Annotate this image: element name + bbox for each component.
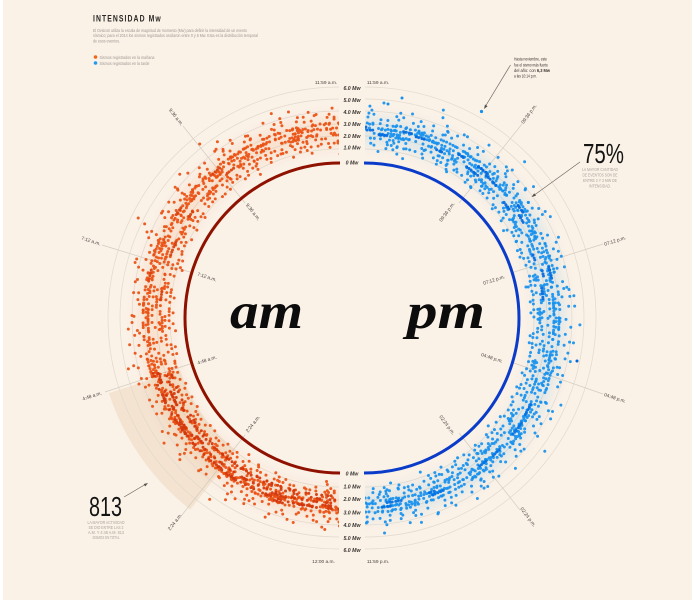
note: strongest earthquake: a las 10:14 p.m.: [514, 74, 537, 78]
magnitude labels bottom: 3.0 Mw: [343, 510, 361, 516]
magnitude labels top: 1.0 Mw: [343, 146, 361, 152]
magnitude labels top: 3.0 Mw: [343, 122, 361, 128]
magnitude labels top: 2.0 Mw: [342, 134, 361, 140]
time labels: 12:00 a.m.: [312, 559, 335, 565]
magnitude labels bottom: 0 Mw: [346, 472, 359, 478]
time labels: 2:24 a.m.: [245, 415, 262, 434]
intro text: El Ovsicori utiliza la escala de magnitud de momento (Mw) para definir la intensidad de un evento: [93, 28, 247, 34]
magnitude labels top: 4.0 Mw: [342, 110, 361, 116]
callout: 813: [88, 491, 125, 540]
big label: am: am: [230, 284, 303, 340]
magnitude labels top: [342, 86, 361, 166]
hour arc: pm: [364, 163, 519, 473]
time labels: 9:36 a.m.: [167, 108, 184, 127]
callout: 813: SISMOS EN TOTAL: [92, 535, 120, 540]
legend: [94, 55, 155, 67]
arrow: 75%: [532, 162, 580, 197]
time labels: 04:48 p.m.: [603, 392, 627, 405]
callout: 75%: INTENSIDAD.: [589, 184, 611, 188]
time labels: 4:48 a.m.: [197, 355, 218, 366]
magnitude labels bottom: [342, 472, 361, 554]
arrow: 813: [124, 483, 148, 497]
callout: 813: 813: [89, 491, 122, 522]
time labels: 11:59 a.m.: [367, 80, 389, 86]
magnitude labels bottom: 2.0 Mw: [342, 497, 361, 503]
intro text: [93, 28, 258, 44]
time spokes: [102, 124, 603, 515]
magnitude labels top: 6.0 Mw: [343, 86, 361, 92]
note: strongest earthquake: [514, 56, 550, 78]
shaded sector: 2 a.m. to 4:48 a.m.: [109, 370, 236, 510]
time labels: 7:12 a.m.: [80, 236, 101, 247]
time labels: 11:59 a.m.: [315, 80, 337, 86]
time labels: 02:24 p.m.: [519, 506, 537, 528]
magnitude labels bottom: 4.0 Mw: [342, 523, 361, 529]
magnitude labels bottom: 5.0 Mw: [343, 536, 361, 542]
time labels: 07:12 p.m.: [603, 235, 627, 248]
magnitude labels bottom: 6.0 Mw: [343, 548, 361, 554]
time labels: 04:48 p.m.: [480, 352, 504, 365]
time labels: 9:36 a.m.: [244, 203, 261, 222]
callout: 75%: LA MAYOR CANTIDAD: [582, 167, 618, 172]
callout: 75%: 75%: [583, 138, 624, 169]
time labels: 11:59 p.m.: [367, 559, 389, 565]
time labels: 7:12 a.m.: [196, 272, 217, 283]
callout: 75%: ENTRE 2 Y 3 MW DE: [583, 178, 617, 183]
time labels: 02:24 p.m.: [438, 414, 456, 436]
magnitude labels top: 0 Mw: [346, 160, 359, 166]
callout: 75%: [582, 138, 624, 188]
time labels: 07:12 p.m.: [482, 274, 506, 287]
callout: 813: A.M. Y 4:48 A.M. 813: [88, 530, 125, 535]
note: strongest earthquake: fue el sismo más fuerte: [514, 62, 548, 68]
magnitude labels top: 5.0 Mw: [343, 98, 361, 104]
arrow: strongest earthquake: [484, 65, 510, 109]
big label: pm: pm: [402, 284, 485, 340]
hour arc: am: [185, 163, 340, 473]
legend: Sismos registrados en la tarde: [100, 61, 150, 67]
time labels: 4:48 a.m.: [82, 391, 103, 402]
note: strongest earthquake: del año: con 6,3 Mw: [514, 68, 550, 73]
magnitude labels bottom: 1.0 Mw: [343, 484, 361, 490]
callout: 75%: DE EVENTOS SON DE: [582, 172, 618, 178]
title: INTENSIDAD Mw: [93, 13, 161, 24]
time labels: 09:36 p.m.: [520, 103, 538, 125]
intro text: de esos eventos.: [93, 38, 120, 44]
callout: 813: SE DIO ENTRE LAS 2: [88, 525, 124, 530]
time labels: 09:36 p.m.: [438, 201, 456, 223]
time labels: 2:24 a.m.: [167, 513, 184, 532]
legend: Sismos registrados en la mañana: [100, 55, 155, 61]
note: strongest earthquake: Hasta noviembre, este: [514, 56, 547, 62]
callout: 813: LA MAYOR ACTIVIDAD: [88, 520, 124, 525]
concentric magnitude rings: [108, 87, 596, 549]
intro text: sísmico; para el 2014 los sismos registrados oscilaron entre 0 y 6 Mw. Esta es la distribución temporal: [93, 33, 258, 39]
scatter: morning earthquakes: [126, 106, 339, 531]
time labels: [80, 80, 627, 565]
scatter: afternoon earthquakes: [362, 96, 590, 540]
